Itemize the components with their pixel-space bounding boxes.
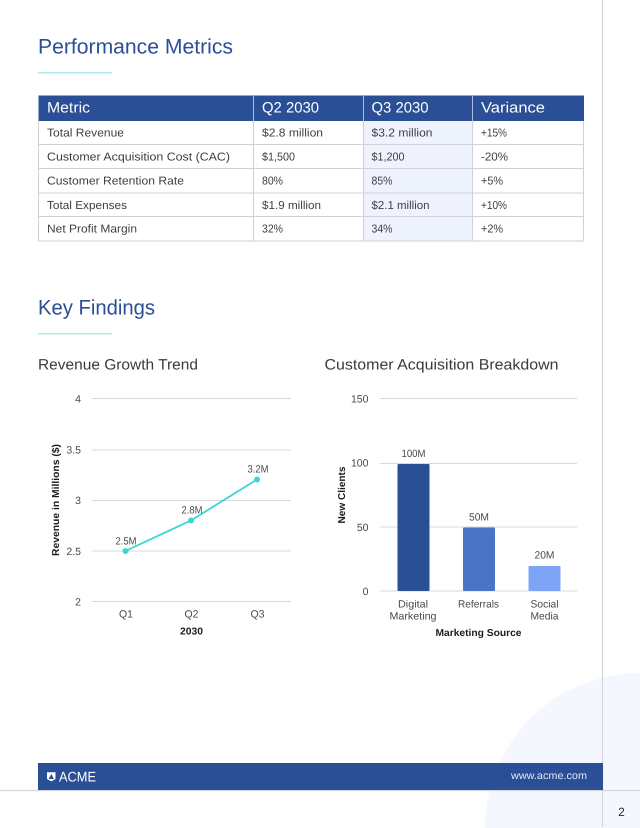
table rows: $1,200 — [372, 152, 404, 164]
y axis labels: 3.5 — [66, 444, 81, 456]
x axis labels: Media — [530, 610, 559, 622]
icon: ACME logo — [47, 772, 56, 781]
bars — [398, 464, 560, 591]
table header: Q3 2030 — [372, 100, 428, 116]
bar value labels — [402, 448, 554, 562]
table rows: $3.2 million — [372, 128, 432, 140]
table header: Variance — [481, 100, 545, 116]
table rows: Total Revenue — [47, 128, 124, 140]
y axis labels: 2 — [75, 596, 81, 608]
x axis title: 2030 — [180, 626, 203, 638]
data labels — [116, 464, 268, 548]
heading accent: Performance Metrics — [38, 72, 112, 74]
table rows: +5% — [481, 176, 503, 188]
x axis labels: Q1 — [119, 608, 133, 620]
x axis labels: Digital — [398, 598, 428, 610]
line chart: revenue growth — [51, 394, 291, 638]
chart title: Customer Acquisition Breakdown: Customer Acquisition Breakdown — [324, 356, 558, 374]
y axis labels: 50 — [357, 522, 369, 534]
brand name: ACME — [59, 768, 96, 784]
x axis labels — [390, 598, 559, 622]
heading: Performance Metrics: Performance Metrics — [38, 36, 233, 58]
data labels: 2.8M — [182, 504, 202, 516]
table rows: +15% — [481, 128, 507, 140]
table rows: Net Profit Margin — [47, 224, 137, 236]
table rows: -20% — [481, 152, 508, 164]
data labels: 2.5M — [116, 536, 136, 548]
bar value labels: 100M — [402, 448, 426, 460]
data line — [126, 480, 257, 551]
table rows: 34% — [372, 224, 392, 236]
heading: Key Findings: Key Findings — [38, 296, 155, 320]
chart title: Revenue Growth Trend: Revenue Growth Trend — [38, 356, 198, 374]
y axis title: New Clients — [337, 466, 348, 524]
page number: 2 — [618, 805, 625, 819]
table rows: Customer Acquisition Cost (CAC) — [47, 152, 230, 164]
table rows: 85% — [372, 176, 392, 188]
x axis labels: Referrals — [458, 598, 499, 610]
bar value labels: 50M — [469, 512, 489, 524]
x axis labels: Q3 — [250, 608, 265, 620]
table rows: $2.1 million — [372, 200, 430, 212]
bar value labels: 20M — [534, 550, 554, 562]
data points — [122, 476, 260, 554]
table header: Metric — [47, 100, 91, 116]
data labels: 3.2M — [248, 464, 268, 476]
table rows: 32% — [262, 224, 283, 236]
table rows: $2.8 million — [262, 128, 323, 140]
y axis labels: 0 — [363, 586, 369, 598]
table header — [38, 96, 584, 121]
x axis labels: Marketing — [390, 610, 437, 622]
footer bar — [38, 763, 603, 790]
table rows: +10% — [481, 200, 507, 212]
x axis labels — [119, 608, 265, 620]
bar chart: customer acquisition — [337, 394, 577, 639]
table header: Q2 2030 — [262, 100, 319, 116]
table rows: +2% — [481, 224, 503, 236]
y axis labels: 2.5 — [66, 546, 81, 558]
y axis labels: 4 — [75, 394, 81, 406]
x axis title: Marketing Source — [436, 628, 522, 639]
y axis title: Revenue in Millions ($) — [51, 444, 62, 556]
table: performance metrics — [38, 96, 584, 241]
table rows: Total Expenses — [47, 200, 127, 212]
table rows: $1.9 million — [262, 200, 321, 212]
y axis labels — [66, 394, 81, 608]
table rows: Customer Retention Rate — [47, 176, 184, 188]
background circle — [485, 673, 640, 828]
heading accent: Key Findings — [38, 333, 112, 334]
website: www.acme.com — [510, 770, 587, 782]
y axis labels — [351, 394, 369, 598]
highlighted Q3 column — [364, 121, 472, 241]
x axis labels: Social — [530, 598, 558, 610]
table rows: $1,500 — [262, 152, 295, 164]
y axis labels: 3 — [75, 495, 81, 507]
table rows — [47, 128, 508, 236]
x axis labels: Q2 — [184, 608, 199, 620]
y axis labels: 150 — [351, 394, 369, 406]
y axis labels: 100 — [351, 458, 369, 470]
table rows: 80% — [262, 176, 283, 188]
